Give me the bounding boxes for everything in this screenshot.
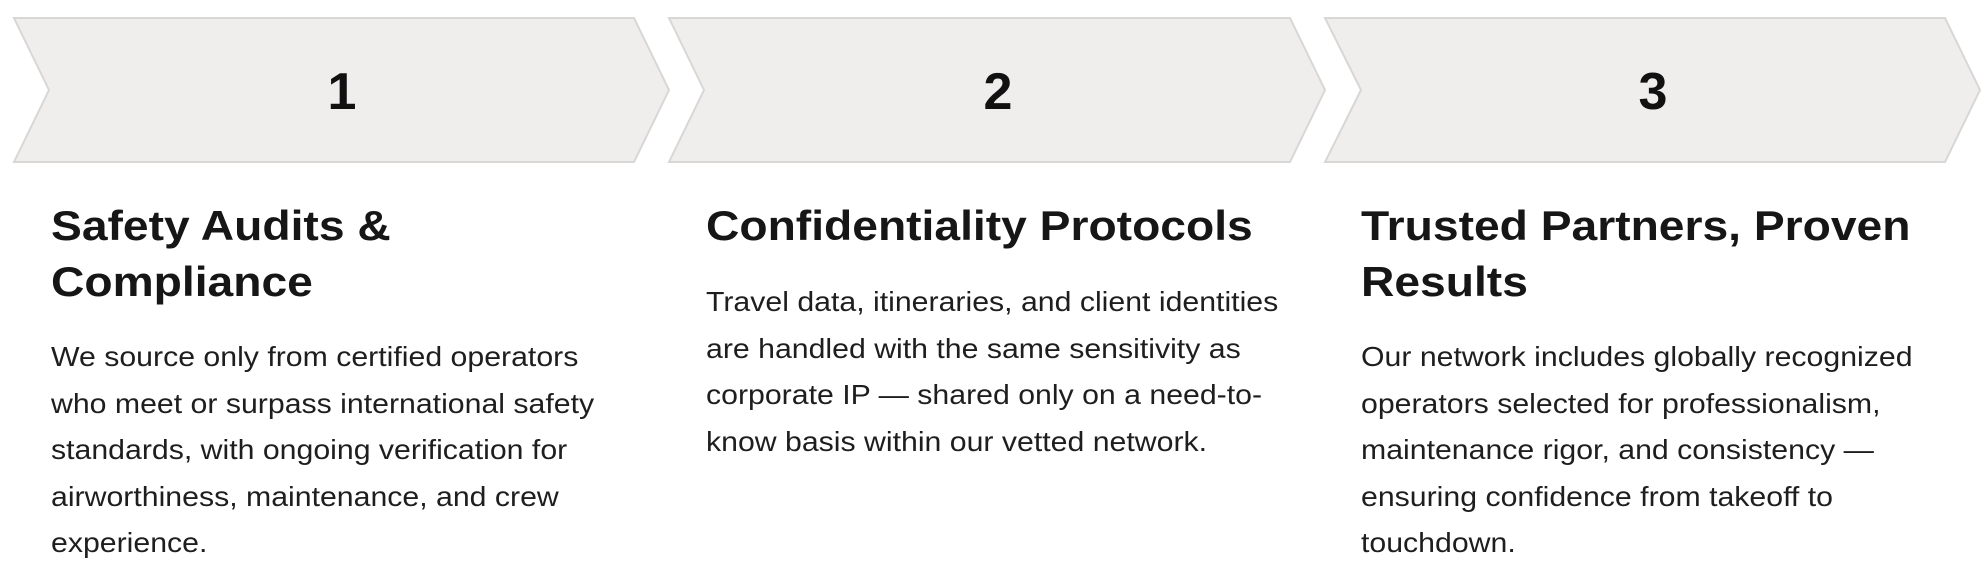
- heading 3: Trusted Partners, Proven: [1361, 202, 1910, 249]
- body text 2: corporate IP — shared only on a need-to-: [706, 379, 1262, 410]
- body text 1: who meet or surpass international safety: [51, 388, 594, 418]
- body text 2: Travel data, itineraries, and client identities: [706, 286, 1278, 317]
- body text 3: ensuring confidence from takeoff to: [1361, 480, 1833, 512]
- body text 2: are handled with the same sensitivity as: [706, 332, 1241, 364]
- body text 3: Our network includes globally recognized: [1361, 341, 1913, 372]
- body text 3: operators selected for professionalism,: [1361, 388, 1881, 418]
- body text 1: [51, 341, 594, 558]
- body text 2: [706, 286, 1278, 456]
- body text 1: airworthiness, maintenance, and crew: [51, 480, 559, 512]
- chevron 3: [1325, 18, 1980, 162]
- heading 1: Compliance: [51, 258, 313, 305]
- body text 1: We source only from certified operators: [51, 341, 578, 372]
- chevron 2: [669, 18, 1325, 162]
- chevron 1: [14, 18, 669, 162]
- body text 3: maintenance rigor, and consistency —: [1361, 434, 1874, 465]
- chevron 1: 1: [328, 63, 356, 121]
- heading 3: [1361, 202, 1910, 305]
- body text 1: experience.: [51, 527, 207, 558]
- heading 1: Safety Audits &: [51, 202, 391, 249]
- heading 2: Confidentiality Protocols: [706, 202, 1253, 249]
- body text 3: touchdown.: [1361, 527, 1516, 558]
- heading 3: Results: [1361, 258, 1528, 305]
- chevron 3: 3: [1639, 63, 1667, 121]
- chevron 2: 2: [984, 63, 1012, 121]
- body text 2: know basis within our vetted network.: [706, 426, 1207, 456]
- body text 1: standards, with ongoing verification for: [51, 434, 567, 465]
- heading 1: [51, 202, 391, 305]
- body text 3: [1361, 341, 1913, 558]
